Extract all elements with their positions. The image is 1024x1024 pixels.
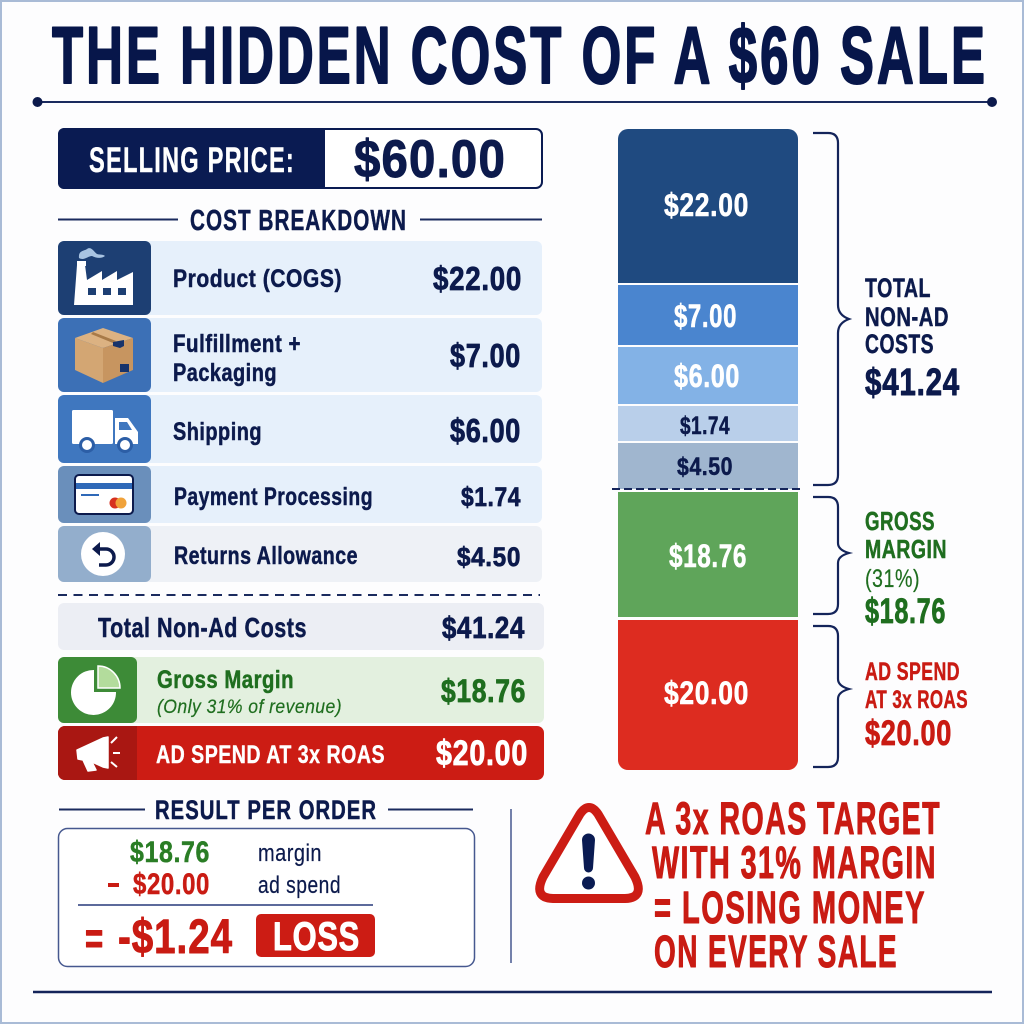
segment: product 22.00: $22.00 xyxy=(664,187,749,223)
margin value: $18.76 xyxy=(130,836,210,869)
value: total: $41.24 xyxy=(442,610,525,645)
label: total non-ad costs: NON-AD xyxy=(865,302,949,332)
icon: factory xyxy=(58,241,151,315)
segment: ad spend 20.00: $20.00 xyxy=(664,675,749,711)
loss badge: LOSS xyxy=(273,915,360,959)
label: ad spend: AD SPEND xyxy=(865,658,960,686)
equals sign: = xyxy=(85,914,104,963)
label: total non-ad costs xyxy=(865,273,960,404)
segment: payment 1.74 xyxy=(618,406,798,441)
row: returns allowance xyxy=(58,526,542,582)
minus sign xyxy=(108,883,119,887)
row: ad spend xyxy=(58,726,544,780)
row: shipping xyxy=(58,395,542,463)
ad spend value: $20.00 xyxy=(133,868,210,901)
label: ad spend: $20.00 xyxy=(865,714,952,753)
segment: payment 1.74: $1.74 xyxy=(680,412,730,440)
heading: cost breakdown: COST BREAKDOWN xyxy=(190,205,407,237)
value: fulfillment: $7.00 xyxy=(450,337,521,374)
icon: pie chart xyxy=(58,657,137,723)
callout: warning message xyxy=(645,793,941,977)
label: gross margin: $18.76 xyxy=(865,592,946,631)
segment: fulfillment 7.00: $7.00 xyxy=(674,298,737,334)
icon: return arrow xyxy=(58,526,151,582)
value: ad spend: $20.00 xyxy=(436,734,528,773)
label: gross margin: (31%) xyxy=(865,565,920,593)
selling price value: $60.00 xyxy=(354,130,506,189)
segment: ad spend 20.00 xyxy=(618,620,798,770)
stacked bar chart xyxy=(612,129,802,770)
icon: box xyxy=(58,318,151,392)
segment: product 22.00 xyxy=(618,129,798,283)
row: total non-ad costs xyxy=(58,603,544,650)
result value: -$1.24 xyxy=(118,911,233,964)
title rule xyxy=(32,97,997,107)
label: product: Product (COGS) xyxy=(173,265,342,293)
row: product cogs xyxy=(58,241,542,315)
label: total: Total Non-Ad Costs xyxy=(98,612,307,643)
label: fulfillment: Packaging xyxy=(173,359,277,387)
label: gross margin: MARGIN xyxy=(865,534,947,564)
segment: returns 4.50: $4.50 xyxy=(677,453,733,481)
label: total non-ad costs: TOTAL xyxy=(865,273,931,303)
segment: gross margin 18.76 xyxy=(618,492,798,617)
label: gross margin: Gross Margin xyxy=(157,666,294,694)
ad spend caption: ad spend xyxy=(258,872,341,899)
margin caption: margin xyxy=(258,840,322,867)
label: ad spend xyxy=(865,658,968,753)
heading: result per order: RESULT PER ORDER xyxy=(155,795,377,825)
label: total non-ad costs: COSTS xyxy=(865,329,934,359)
segment: shipping 6.00: $6.00 xyxy=(674,358,740,394)
panel: result calculation xyxy=(58,828,474,966)
bracket: non-ad costs xyxy=(813,133,849,485)
value: shipping: $6.00 xyxy=(450,412,521,449)
segment: fulfillment 7.00 xyxy=(618,285,798,345)
label: fulfillment xyxy=(173,330,301,387)
segment: shipping 6.00 xyxy=(618,347,798,404)
selling price label: SELLING PRICE: xyxy=(89,141,295,180)
icon: credit card xyxy=(58,466,151,523)
label: ad spend: AT 3x ROAS xyxy=(865,686,968,714)
bracket: gross margin xyxy=(813,497,849,614)
label: gross margin xyxy=(865,506,947,631)
label: gross margin: GROSS xyxy=(865,506,935,536)
row: fulfillment xyxy=(58,318,542,392)
row: gross margin xyxy=(58,657,544,723)
bracket: ad spend xyxy=(813,626,849,767)
value: returns: $4.50 xyxy=(457,542,521,572)
label: payment: Payment Processing xyxy=(174,483,373,511)
icon: truck xyxy=(58,395,151,463)
note: share of revenue: (Only 31% of revenue) xyxy=(157,697,342,718)
value: product: $22.00 xyxy=(433,260,522,297)
label: total non-ad costs: $41.24 xyxy=(865,362,960,404)
label: returns: Returns Allowance xyxy=(174,542,358,570)
value: gross margin: $18.76 xyxy=(441,673,526,709)
label: ad spend: AD SPEND AT 3x ROAS xyxy=(156,741,385,769)
label: shipping: Shipping xyxy=(173,418,262,446)
label: fulfillment: Fulfillment + xyxy=(173,330,301,358)
segment: returns 4.50 xyxy=(618,443,798,489)
segment: gross margin 18.76: $18.76 xyxy=(669,538,747,574)
icon: megaphone xyxy=(58,726,137,780)
value: payment: $1.74 xyxy=(461,482,521,512)
row: payment processing xyxy=(58,466,542,523)
icon: warning triangle xyxy=(540,808,638,898)
panel: selling price xyxy=(58,128,542,189)
